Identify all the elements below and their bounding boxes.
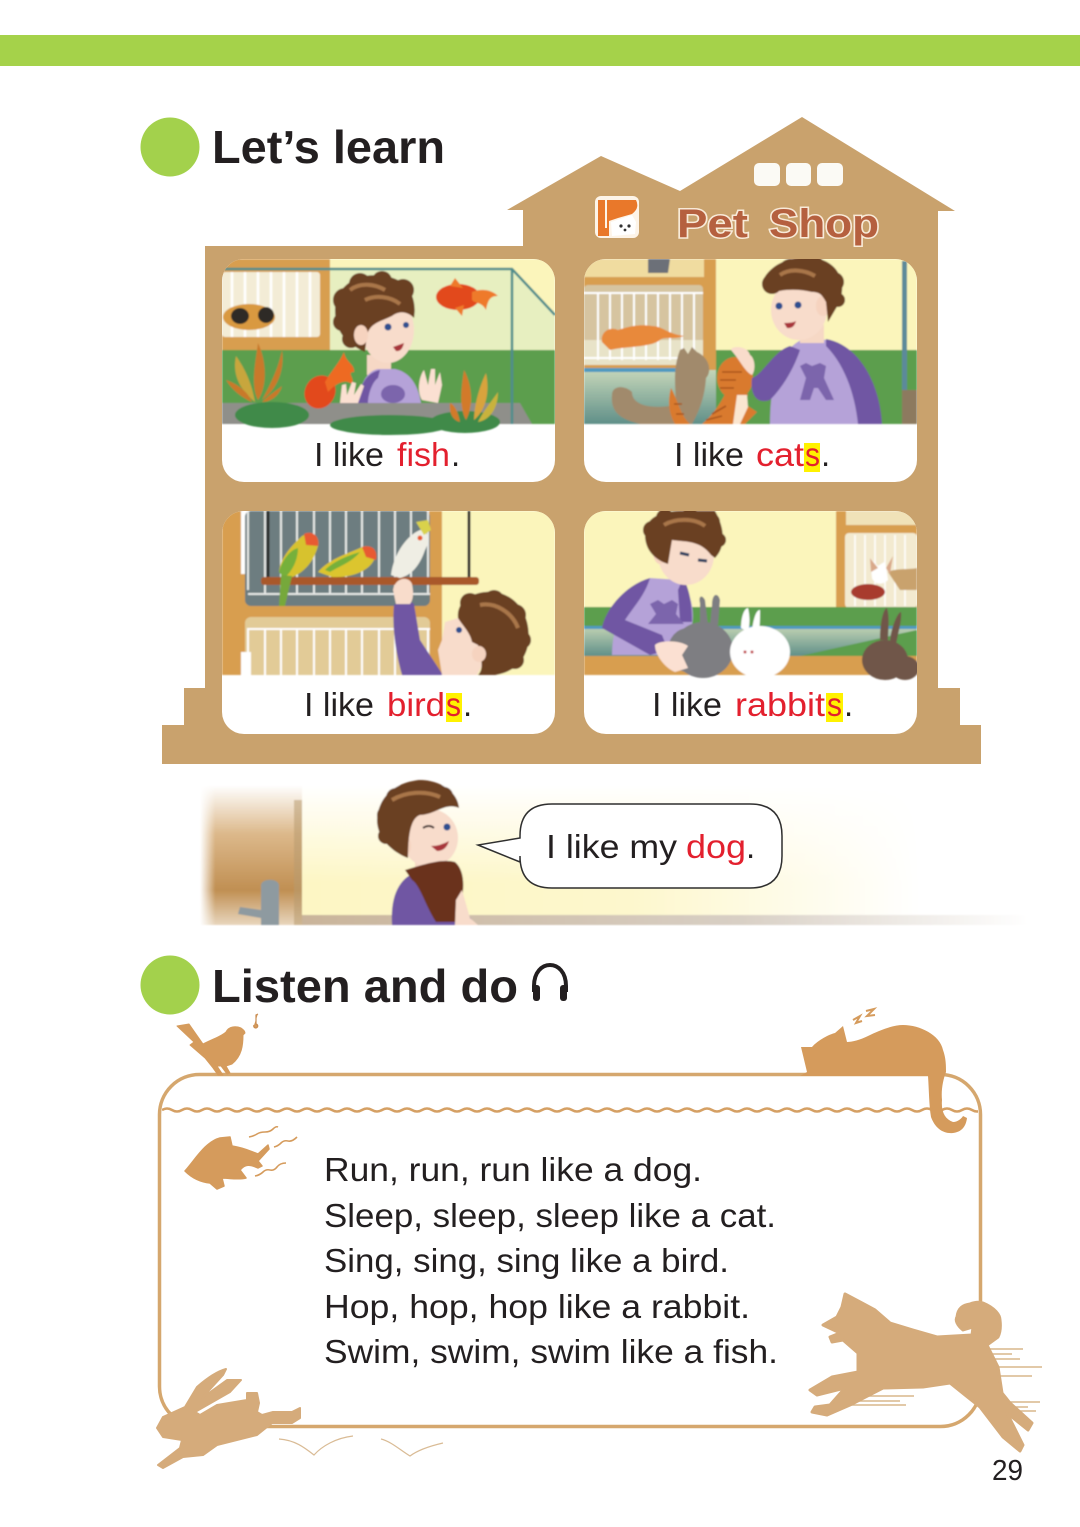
caption: I like fish.: I like — [314, 436, 384, 473]
poem text: Swim, swim, swim like a fish. — [324, 1333, 778, 1370]
icon: parrot 1 — [279, 533, 318, 606]
speech bubble: . — [746, 828, 755, 865]
panel: I like rabbits — [584, 508, 919, 734]
icon: headphones — [533, 965, 567, 1001]
caption: I like rabbits. — [652, 686, 853, 723]
boy — [731, 257, 882, 424]
icon: dog in cage — [851, 556, 917, 600]
caption: I like fish. — [314, 436, 460, 473]
icon: sleeping cat — [800, 1009, 967, 1133]
brown cat — [612, 347, 709, 424]
poem text: Sleep, sleep, sleep like a cat. — [324, 1197, 776, 1234]
boy — [377, 780, 476, 925]
speech bubble — [478, 804, 782, 888]
poem text: Hop, hop, hop like a rabbit. — [324, 1288, 750, 1325]
boy — [602, 508, 726, 655]
icon: goldfish top — [436, 278, 498, 316]
panel: I like cats — [584, 257, 917, 482]
wavy divider — [162, 1108, 1002, 1112]
pet shop sign — [677, 202, 879, 246]
heading: Let's learn — [140, 118, 445, 176]
caption: I like rabbits.: I like — [652, 686, 722, 723]
attic windows — [754, 163, 843, 186]
icon: grey rabbit — [668, 595, 733, 678]
icon: parrot 2 — [318, 546, 376, 577]
caption: I like rabbits.: . — [844, 686, 853, 723]
heading: Let's learn: Let’s learn — [212, 121, 445, 173]
icon: hopping rabbit — [157, 1369, 300, 1468]
icon: cat in cage — [602, 325, 684, 350]
caption: I like rabbits.: s — [827, 686, 842, 723]
scene: boy hugging dog — [200, 780, 1030, 925]
hand — [731, 347, 754, 375]
caption: I like birds.: I like — [304, 686, 374, 723]
pet shop sign: Pet — [677, 202, 748, 246]
icon: dog — [405, 861, 463, 922]
caption: I like fish.: fish — [397, 436, 450, 473]
icon: running dog — [810, 1294, 1042, 1451]
speech bubble: dog — [686, 828, 746, 865]
icon: cockatiel — [391, 520, 431, 578]
caption: I like cats.: I like — [674, 436, 744, 473]
caption: I like cats.: s — [805, 436, 820, 473]
caption: I like rabbits.: rabbit — [735, 686, 825, 723]
page number: 29 — [992, 1455, 1023, 1487]
heading: Listen and do: Listen and do — [212, 960, 518, 1012]
pet shop building — [162, 117, 981, 764]
caption: I like birds.: bird — [387, 686, 445, 723]
icon: swimming fish — [185, 1127, 297, 1189]
poem text: Sing, sing, sing like a bird. — [324, 1242, 729, 1279]
icon: brown rabbit — [862, 608, 919, 680]
caption: I like cats. — [674, 436, 830, 473]
icon: left plant — [226, 343, 283, 402]
caption: I like birds.: . — [463, 686, 472, 723]
pet shop sign: Shop — [769, 202, 879, 246]
speech bubble: I like my — [546, 828, 678, 865]
aquarium frame — [222, 269, 555, 424]
icon: small flying birds — [279, 1436, 443, 1456]
ropes — [268, 511, 469, 585]
perch — [261, 577, 479, 585]
caption: I like birds.: s — [446, 686, 461, 723]
top green bar — [0, 35, 1080, 66]
orange kitten — [669, 357, 757, 424]
heading: Listen and do — [140, 956, 567, 1014]
icon: singing bird — [177, 1014, 258, 1075]
caption: I like fish.: . — [451, 436, 460, 473]
hands — [340, 382, 364, 403]
caption: I like cats.: cat — [756, 436, 804, 473]
poem frame — [160, 1074, 1002, 1426]
panel: I like fish — [222, 259, 555, 482]
icon: goldfish bottom — [303, 352, 356, 410]
panel: I like birds — [222, 511, 555, 734]
poem text: Run, run, run like a dog. — [324, 1151, 702, 1188]
poem text — [324, 1151, 778, 1370]
caption: I like birds. — [304, 686, 472, 723]
icon: pet shop logo — [595, 196, 639, 238]
boy — [393, 579, 531, 675]
caption: I like cats.: . — [821, 436, 830, 473]
icon: right plant — [450, 370, 498, 422]
icon: door handle — [238, 880, 279, 925]
boy — [333, 271, 442, 403]
icon: white rabbit — [730, 608, 790, 678]
